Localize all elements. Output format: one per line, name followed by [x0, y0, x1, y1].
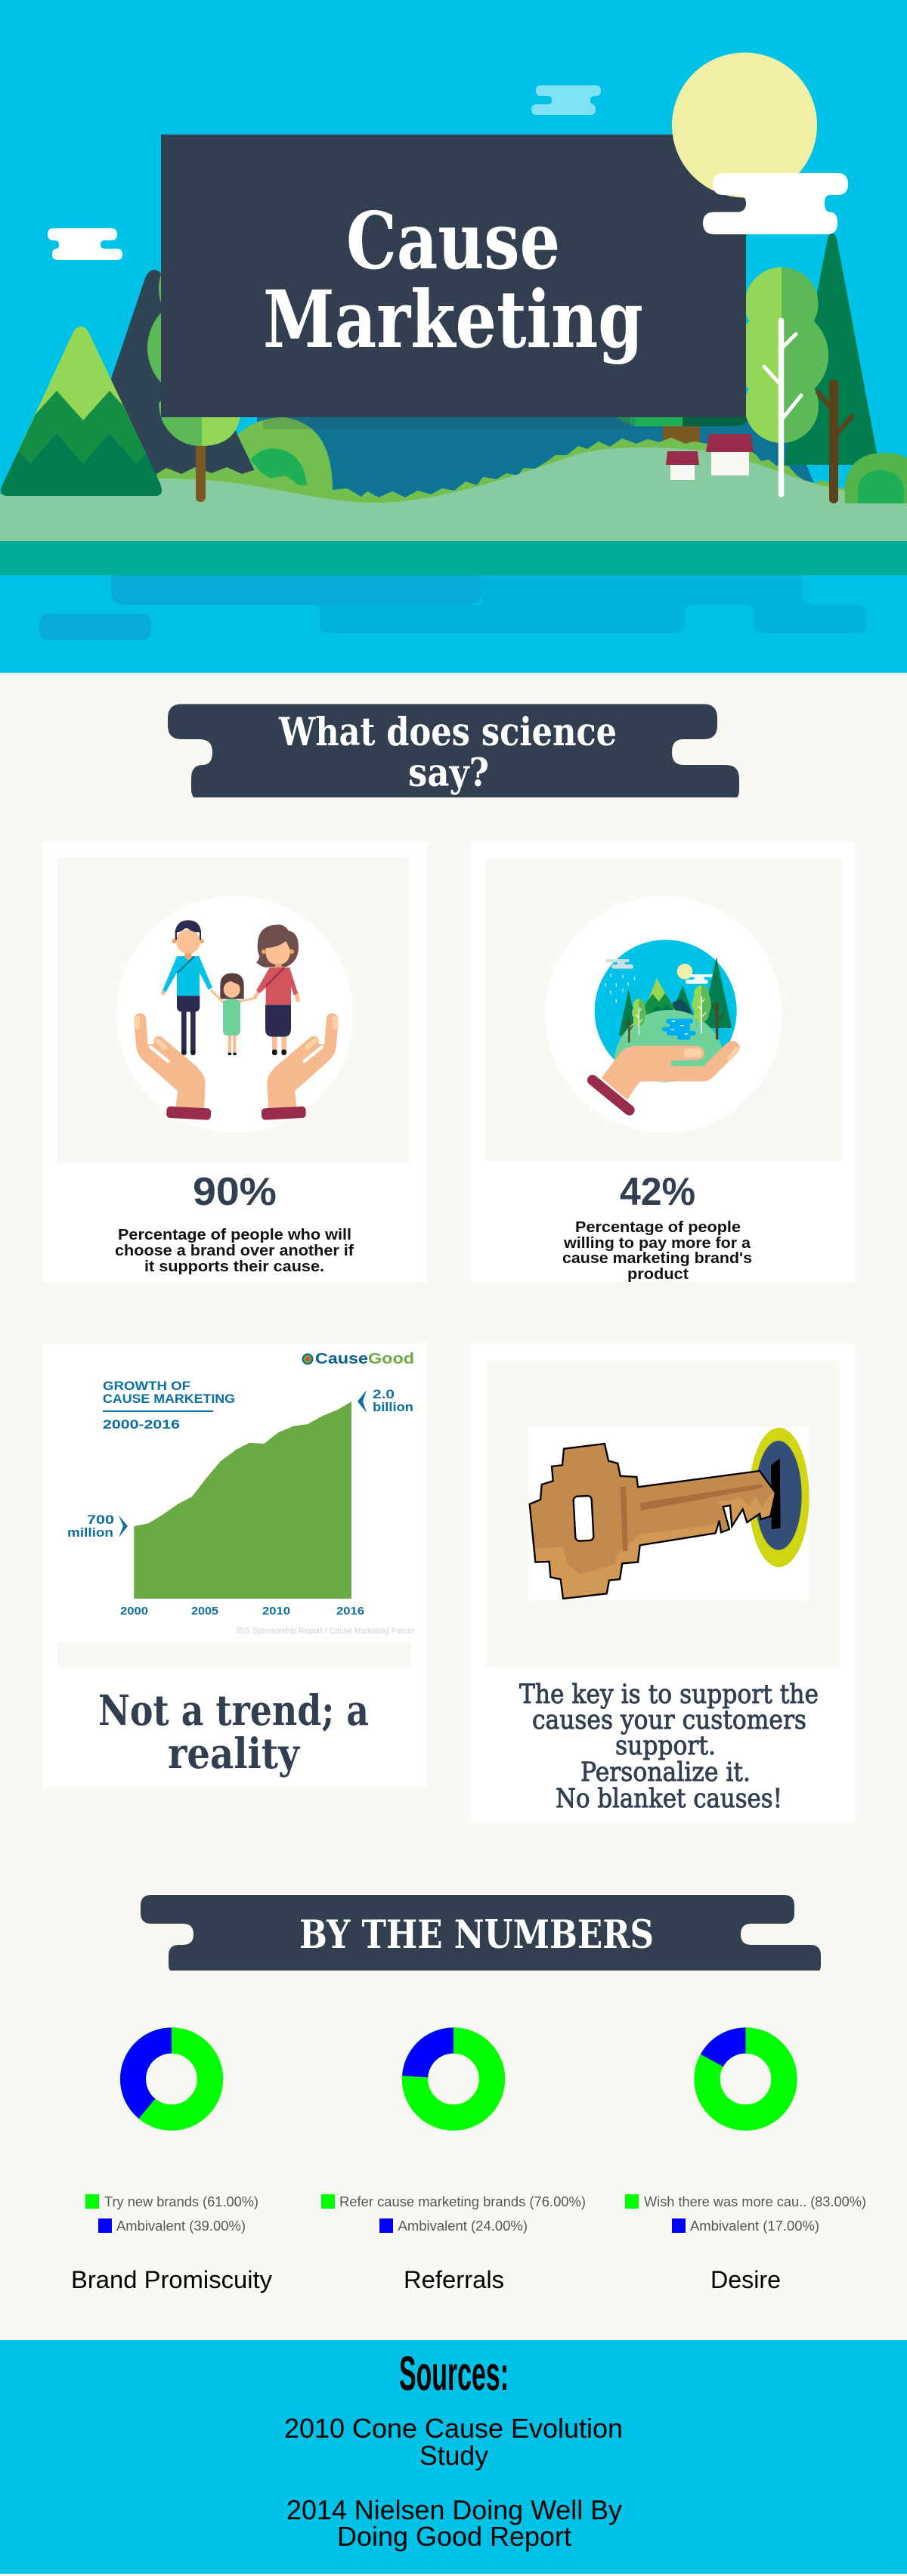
label: brand promiscuity: Brand Promiscuity: [71, 2266, 272, 2293]
title: [263, 194, 643, 366]
icon: tree under panel: [618, 417, 752, 447]
donut chart: referrals: [402, 2027, 492, 2118]
icon: large house: [706, 434, 754, 475]
description: 90 percent: [115, 1227, 354, 1275]
panel: 90 percent card: [42, 842, 427, 1282]
panel: growth chart card: [42, 1343, 427, 1786]
panel: hero landscape: [0, 0, 907, 673]
mini sun: [677, 964, 692, 980]
x axis labels: 2000: [120, 1605, 148, 1618]
area chart: [134, 1401, 351, 1599]
logo: CauseGood: [302, 1351, 414, 1367]
mini lake: [662, 1019, 696, 1040]
source list: [284, 2413, 623, 2552]
chart title: GROWTH OF: [103, 1379, 190, 1393]
description: 42 percent: cause marketing brand's: [562, 1250, 752, 1267]
chart title: CAUSE MARKETING: [103, 1392, 235, 1406]
caption: the key: support.: [615, 1731, 716, 1761]
icon: family in caring hands: [134, 920, 339, 1120]
right hand: [262, 1014, 339, 1120]
title: Marketing: [263, 273, 643, 366]
caption: not a trend: reality: [168, 1729, 301, 1778]
holding hand: [593, 1041, 740, 1110]
girl: [212, 973, 256, 1055]
legend: referrals: Refer cause marketing brands (76.00%): [339, 2194, 586, 2209]
caption: not a trend: Not a trend; a: [98, 1686, 369, 1735]
source list: 2014 Nielsen Doing Well By: [286, 2494, 622, 2525]
heading: by the numbers: BY THE NUMBERS: [299, 1912, 654, 1958]
icon: key in keyhole: [530, 1428, 809, 1599]
callout: 2.0 billion: billion: [373, 1400, 413, 1414]
icon: hand holding nature scene: [593, 940, 740, 1122]
mini clouds and rain: [605, 959, 635, 1003]
callout: 700 million: 700: [87, 1512, 114, 1527]
legend: referrals: Ambivalent (24.00%): [398, 2218, 528, 2234]
icon: white birch tree: [764, 320, 801, 494]
callout: 2.0 billion: 2.0: [373, 1387, 395, 1401]
panel: key card: [471, 1344, 855, 1823]
panel: title background: [161, 135, 746, 417]
title: Cause: [346, 194, 560, 287]
label: desire: Desire: [710, 2266, 781, 2293]
x axis labels: [120, 1605, 364, 1618]
icon: front mountain: [1, 327, 162, 496]
chart source: IEG Sponsorship Report / Cause Marketing Forum: [237, 1627, 414, 1636]
donut chart: desire: [701, 2027, 785, 2118]
legend: brand promiscuity: Try new brands (61.00%): [104, 2194, 258, 2209]
x axis labels: 2005: [191, 1605, 218, 1618]
icon: small house: [666, 451, 699, 480]
legend: brand promiscuity: Ambivalent (39.00%): [116, 2218, 246, 2234]
logo: CauseGood: Cause: [315, 1351, 368, 1367]
mini white cloud: [686, 974, 714, 984]
description: 90 percent: Percentage of people who will: [118, 1227, 351, 1243]
logo: CauseGood: Good: [368, 1351, 414, 1367]
icon: left tree trunk: [196, 446, 206, 502]
source list: Doing Good Report: [337, 2521, 571, 2552]
donut chart: brand promiscuity: [120, 2027, 210, 2119]
chart title: [103, 1379, 235, 1432]
water reflections: [39, 563, 866, 640]
heading: by the numbers: [141, 1895, 821, 1971]
description: 42 percent: willing to pay more for a: [563, 1235, 751, 1252]
legend: desire: Wish there was more cau.. (83.00%): [644, 2194, 866, 2209]
heading: sources: Sources:: [399, 2346, 509, 2401]
panel: sources footer: [0, 2340, 907, 2574]
icon: sun: [672, 53, 817, 198]
sky and water background: [0, 0, 907, 673]
heading: what does science say: [168, 704, 739, 797]
left hand: [134, 1014, 211, 1120]
description: 42 percent: product: [627, 1266, 689, 1283]
legend: referrals: [321, 2194, 586, 2234]
x axis labels: 2016: [336, 1605, 364, 1618]
river band: [0, 541, 907, 575]
callout: 2.0 billion: [358, 1387, 413, 1414]
heading: what does science say: What does science: [278, 710, 617, 755]
icon: dark mountain: [76, 270, 261, 484]
x axis labels: 2010: [262, 1605, 290, 1618]
panel: 42 percent card: [471, 842, 855, 1283]
legend: brand promiscuity: [85, 2194, 258, 2234]
icon: right lobed tree: [746, 268, 828, 443]
icon: light cloud: [531, 85, 601, 115]
ground hill: [0, 447, 907, 541]
caption: the key: The key is to support the: [519, 1680, 819, 1710]
description: 42 percent: [562, 1219, 752, 1283]
man: [161, 920, 212, 1055]
icon: right bush: [845, 453, 907, 503]
legend: desire: [625, 2194, 866, 2234]
icon: large white cloud: [703, 173, 848, 234]
label: referrals: Referrals: [404, 2266, 504, 2293]
chart title: 2000-2016: [103, 1417, 180, 1432]
icon: left white cloud: [48, 228, 122, 260]
icon: wavy grass strip: [156, 438, 907, 514]
heading: what does science say: say?: [408, 751, 489, 796]
legend: desire: Ambivalent (17.00%): [690, 2218, 819, 2234]
mini trees: [619, 957, 732, 1036]
caption: the key: Personalize it.: [580, 1757, 751, 1788]
lake: [257, 417, 814, 506]
mini birch trees: [626, 986, 723, 1042]
mini hill: [614, 1010, 723, 1082]
icon: left round tree: [147, 243, 256, 502]
callout: 700 million: million: [67, 1525, 113, 1540]
source list: Study: [419, 2440, 488, 2471]
description: 90 percent: it supports their cause.: [144, 1259, 324, 1275]
shadow under title panel: [263, 417, 630, 429]
icon: bush behind lake: [237, 417, 333, 491]
caption: the key: [519, 1680, 819, 1814]
stat: 90%: 90%: [193, 1170, 277, 1214]
caption: the key: No blanket causes!: [556, 1784, 782, 1814]
caption: not a trend: [98, 1686, 369, 1778]
icon: tall pine tree: [784, 234, 879, 465]
callout: 700 million: [67, 1512, 128, 1540]
description: 90 percent: choose a brand over another if: [115, 1243, 354, 1259]
stat: 42%: 42%: [620, 1170, 695, 1214]
description: 42 percent: Percentage of people: [575, 1219, 741, 1236]
caption: the key: causes your customers: [532, 1705, 806, 1735]
source list: 2010 Cone Cause Evolution: [284, 2413, 623, 2444]
icon: brown bare tree: [818, 384, 852, 499]
mini mountains: [644, 978, 693, 1015]
woman: [255, 924, 299, 1055]
